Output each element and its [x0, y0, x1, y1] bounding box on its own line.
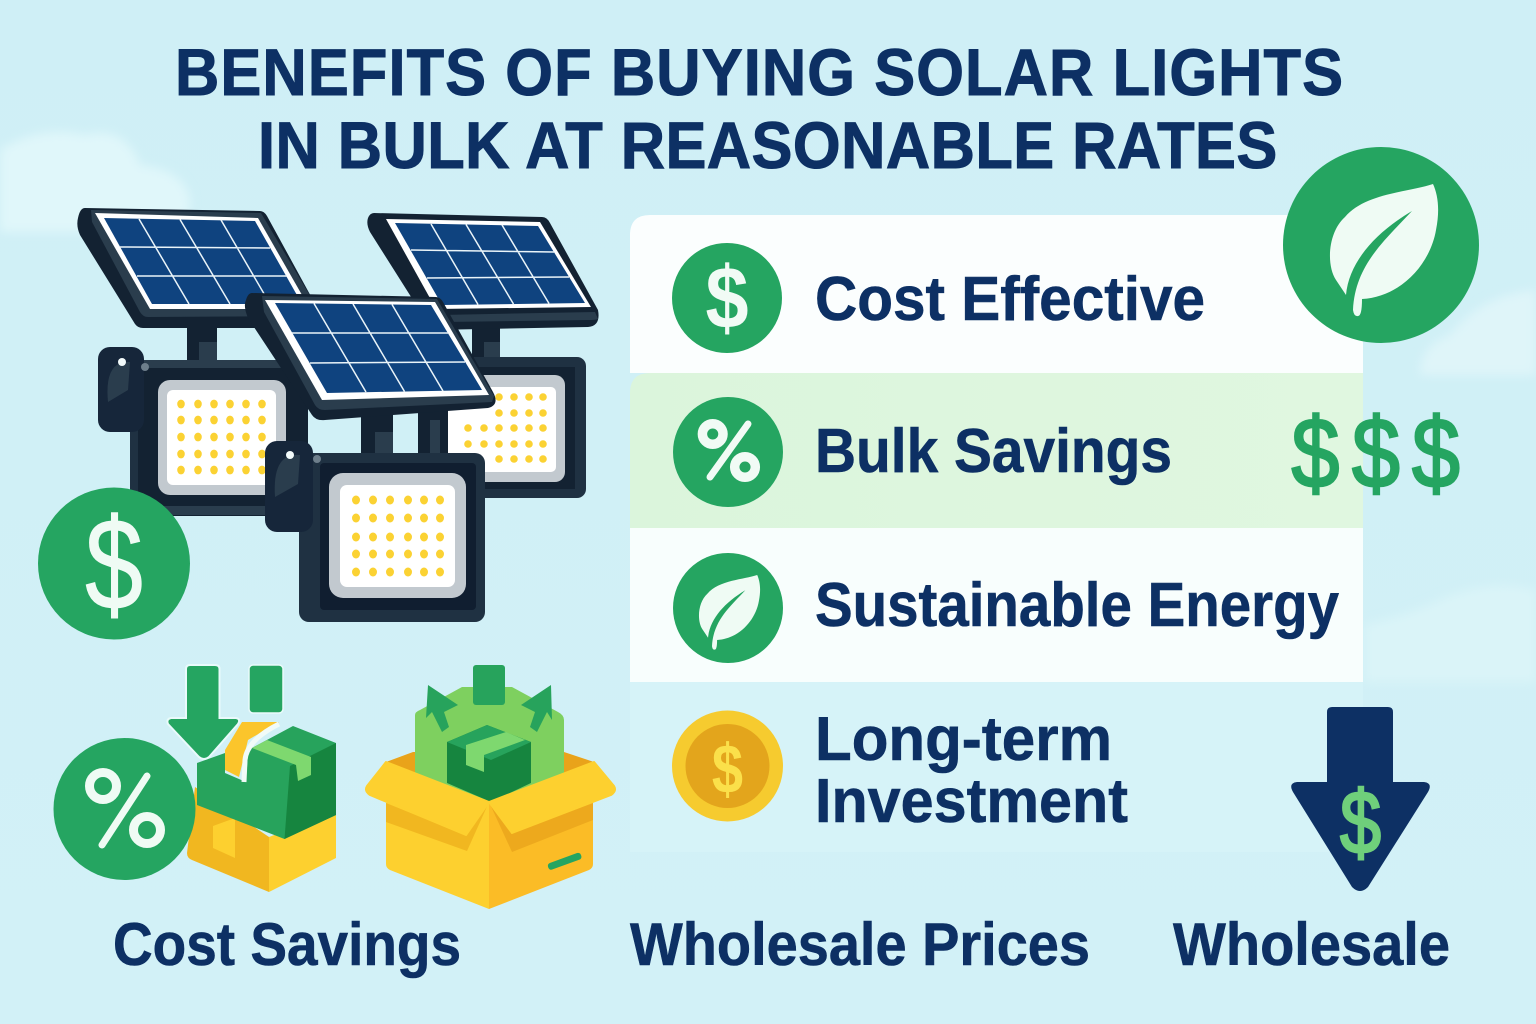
icon: dollar circle: $ [85, 491, 143, 637]
dollar signs: $ [1412, 397, 1460, 508]
row: bulk savings [630, 373, 1363, 528]
row: cost effective: Cost Effective [815, 265, 1205, 334]
row: cost effective: $ [705, 248, 749, 347]
row: long-term investment: Investment [815, 767, 1128, 836]
icon: dollar circle [38, 488, 190, 640]
rear left solar panel [77, 208, 325, 328]
icon: wholesale down arrow: $ [1340, 774, 1381, 873]
row: sustainable energy [630, 528, 1363, 682]
front lamp [265, 441, 485, 622]
bottom labels [113, 911, 1450, 978]
dollar signs: $ [1292, 397, 1339, 508]
icon: wholesale down arrow [1291, 707, 1430, 891]
title: BENEFITS OF BUYING SOLAR LIGHTS [175, 35, 1343, 109]
icon: large leaf circle [1283, 147, 1479, 343]
icon: open wholesale box [366, 665, 615, 909]
row: long-term investment [630, 682, 1363, 852]
down arrow [167, 665, 239, 759]
percent circle [54, 738, 196, 880]
title: IN BULK AT REASONABLE RATES [258, 108, 1277, 182]
rectangle arrow stem [249, 665, 283, 713]
title [175, 35, 1343, 182]
yellow box [187, 787, 336, 892]
bottom labels: Wholesale [1173, 911, 1450, 978]
front solar panel [245, 293, 496, 460]
bottom labels: Cost Savings [113, 911, 461, 978]
solar lights illustration [77, 208, 599, 622]
row: bulk savings: Bulk Savings [815, 417, 1172, 486]
panel: benefits list [630, 215, 1363, 852]
dollar signs [1292, 397, 1460, 508]
row: long-term investment: $ [712, 731, 743, 808]
rear left lamp [98, 325, 308, 516]
icon: cost savings boxes [54, 665, 336, 892]
row: sustainable energy: Sustainable Energy [815, 571, 1339, 640]
row: long-term investment: Long-term [815, 705, 1112, 774]
row: cost effective [630, 215, 1363, 373]
rear right lamp [440, 325, 586, 498]
bottom labels: Wholesale Prices [630, 911, 1090, 978]
dollar signs: $ [1352, 397, 1400, 508]
rear right solar panel [367, 213, 599, 330]
green box [197, 722, 336, 839]
